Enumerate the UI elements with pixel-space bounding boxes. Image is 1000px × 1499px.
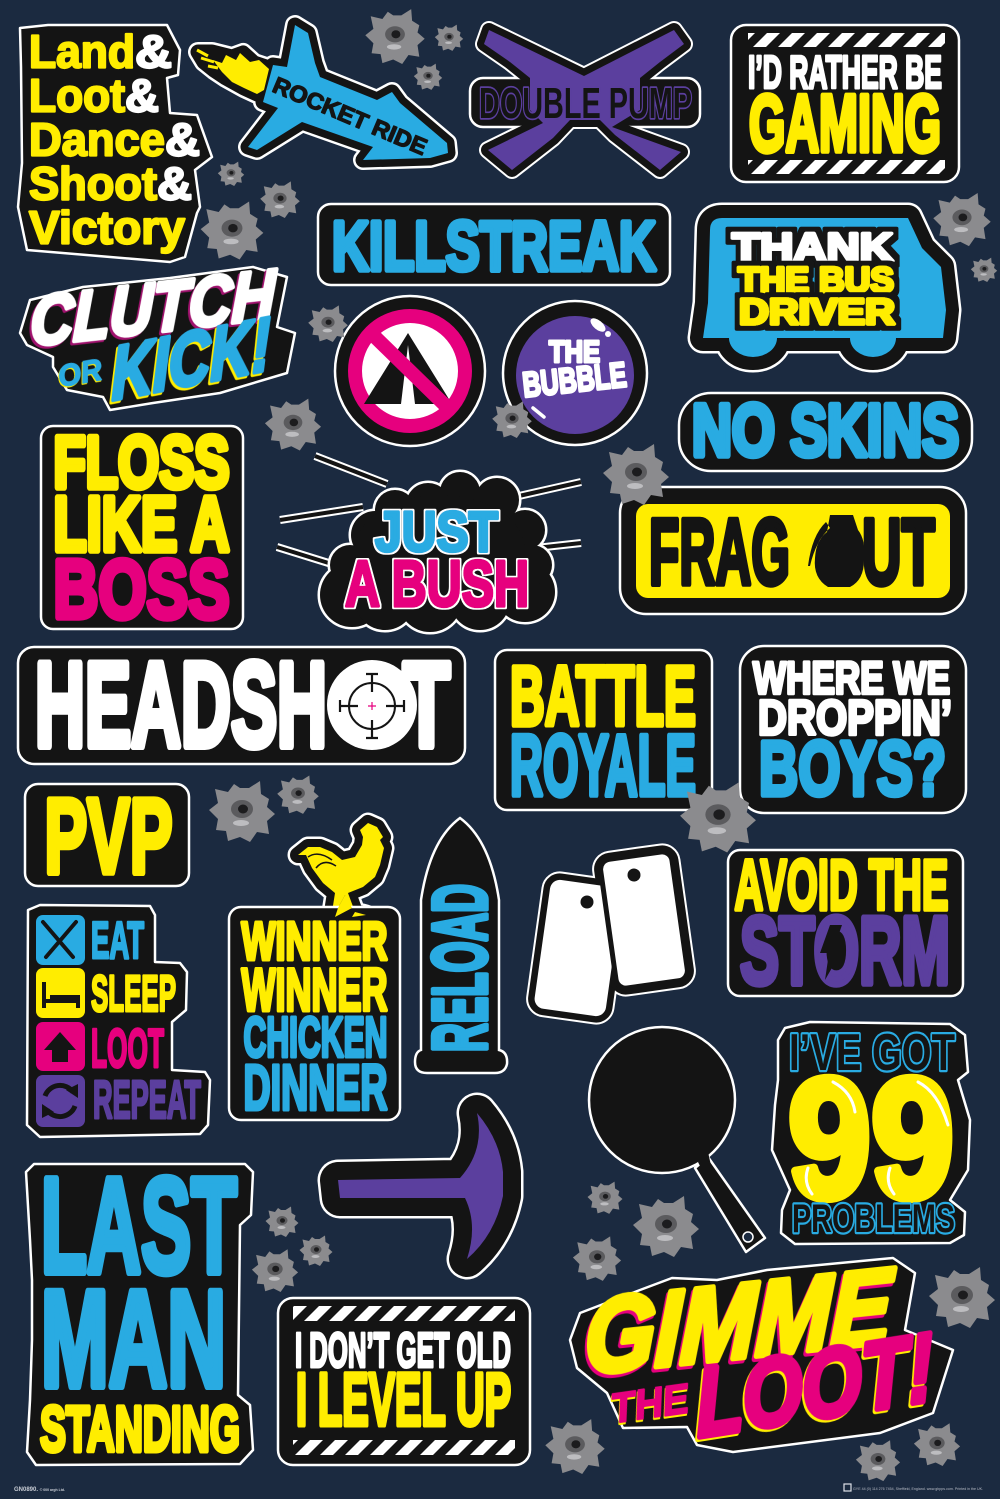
sticker: land loot dance shoot victory: Dance [29,114,165,166]
sticker: the bubble: BUBBLE [521,355,628,405]
sticker: eat sleep loot repeat: EAT [91,912,144,970]
sticker: floss like a boss: BOSS [54,542,230,636]
icon: bullet hole [266,1206,298,1237]
sticker: winner winner chicken dinner: DINNER [244,1052,388,1124]
icon: bullet hole [856,1440,900,1481]
icon: refresh [36,1075,85,1127]
sticker: frag out with grenade [620,487,966,614]
icon: bullet hole [573,1236,621,1281]
sticker: floss like a boss: LIKE A [54,482,230,568]
sticker: avoid the storm [728,846,963,1004]
sticker: battle royale: BATTLE [510,649,696,743]
icon: bullet hole [914,1423,960,1466]
sticker: land loot dance shoot victory: & [157,158,192,210]
sticker: battle royale: ROYALE [510,718,696,814]
icon: rooster [298,823,384,917]
icon: bullet hole [492,401,532,438]
sticker: reload bullet [415,818,507,1073]
sticker: just a bush with rifles [277,456,581,632]
sticker: thank the bus driver: THE BUS [738,261,894,300]
icon: no camping sign [335,296,485,446]
icon: bullet hole [414,64,442,90]
icon: bullet hole [633,1196,699,1257]
sticker: just a bush with rifles: JUST [375,500,498,564]
icon: dog tags [533,851,689,1017]
sticker: killstreak: KILLSTREAK [332,207,656,285]
icon: bullet hole [209,781,275,842]
icon: bullet hole [252,1249,298,1292]
sticker: clutch or kick: KICK! [111,301,271,416]
sticker: reload bullet: RELOAD [418,884,503,1052]
sticker: eat sleep loot repeat: SLEEP [91,965,176,1022]
sticker: floss like a boss: FLOSS [54,422,230,504]
sticker: land loot dance shoot victory: & [165,114,200,166]
sticker: just a bush with rifles: A BUSH [345,547,529,620]
sticker: land loot dance shoot victory: Loot [29,70,125,122]
icon: bullet hole [435,25,463,51]
icon: bullet hole [680,782,756,852]
sticker: rocket ride plane [197,25,448,160]
sticker: eat sleep loot repeat: LOOT [91,1017,164,1079]
sticker: land loot dance shoot victory: Shoot [29,158,157,210]
sticker: headshot with crosshair: HEADSH [35,638,327,772]
sticker: i've got 99 problems: 99 [788,1044,954,1234]
sticker: double pump crossed shotguns [470,30,700,170]
icon: bullet hole [929,1267,995,1328]
icon: bullet hole [260,181,300,218]
sticker: thank the bus driver [703,218,946,357]
sticker: land loot dance shoot victory [18,25,212,262]
icon: pickaxe [338,1113,503,1259]
sticker: eat sleep loot repeat [27,905,210,1137]
sticker: land loot dance shoot victory: & [125,70,159,122]
sticker: frag out with grenade: FRAG [649,499,790,604]
sticker: pvp: PVP [44,778,172,896]
sticker: eat sleep loot repeat: REPEAT [93,1070,201,1130]
icon: bullet hole [277,775,319,814]
icon: bullet hole [201,202,263,260]
sticker: last man standing: STANDING [40,1393,240,1465]
sticker: last man standing: LAST [41,1150,237,1301]
icon: crosshair [327,660,417,750]
icon: bullet hole [933,193,991,246]
sticker: where we droppin' boys: DROPPIN’ [758,692,952,746]
footer: product code: GN0890. © 000 argh Ltd. [14,1487,65,1493]
sticker: the bubble [503,301,647,445]
sticker: land loot dance shoot victory: & [135,26,172,78]
icon: bullet hole [603,444,669,505]
sticker: battle royale [495,649,712,814]
sticker: thank the bus driver: THANK [732,226,893,270]
sticker: rocket ride plane: ROCKET RIDE [269,72,431,160]
sticker: clutch or kick: OR [55,352,105,394]
sticker: winner winner chicken dinner: WINNER [242,956,388,1024]
sticker: land loot dance shoot victory: Victory [29,202,185,254]
icon: bullet hole [265,399,321,450]
sticker: frag out with grenade: UT [862,499,935,604]
icon: bullet hole [365,9,425,64]
icon: bed [36,968,85,1018]
icon: up arrow [36,1022,85,1071]
icon: bullet hole [308,305,348,342]
icon: bullet hole [971,258,997,282]
icon: fork and knife [36,915,85,965]
sticker: gimme the loot: THE [608,1374,693,1432]
icon: lightning bolt [820,925,845,980]
sticker: i don't get old i level up [278,1298,530,1465]
icon: frying pan [589,1027,765,1252]
icon: bullet hole [300,1236,332,1266]
sticker: i don't get old i level up: I DON’T GET OLD [295,1324,511,1378]
sticker: winner winner chicken dinner: WINNER [242,912,388,972]
sticker: the bubble: THE [549,334,600,369]
sticker: thank the bus driver: DRIVER [739,291,895,332]
sticker: gimme the loot: GIMME [583,1245,896,1397]
sticker: winner winner chicken dinner [229,895,400,1124]
sticker: double pump crossed shotguns: DOUBLE PUMP [479,79,692,128]
sticker: gimme the loot [570,1245,953,1458]
sticker: winner winner chicken dinner: CHICKEN [244,1006,388,1070]
icon: bullet hole [218,162,244,186]
footer: publisher details [844,1484,983,1491]
sticker: gimme the loot: LOOT! [693,1313,936,1458]
sticker: where we droppin' boys: WHERE WE [753,652,950,704]
sticker: last man standing [26,1150,253,1465]
sticker: headshot with crosshair: T [403,638,450,772]
sticker: land loot dance shoot victory: Land [29,26,135,78]
sticker: floss like a boss [41,422,243,636]
sticker: last man standing: MAN [41,1263,226,1416]
sticker: clutch or kick [20,254,295,416]
sticker: i don't get old i level up: I LEVEL UP [296,1358,511,1441]
sticker: clutch or kick: CLUTCH [30,254,277,361]
sticker: pvp [25,778,189,896]
icon: bullet hole [545,1419,605,1474]
sticker: i'd rather be gaming [731,25,959,182]
footer: publisher details: GYE 44 (0) 114 276 7454, Sheffield, England. www.gbpps.com. Printed in the UK. [853,1487,983,1491]
icon: grenade [808,515,864,587]
icon: bullet hole [588,1182,622,1214]
sticker: where we droppin' boys [740,646,966,813]
